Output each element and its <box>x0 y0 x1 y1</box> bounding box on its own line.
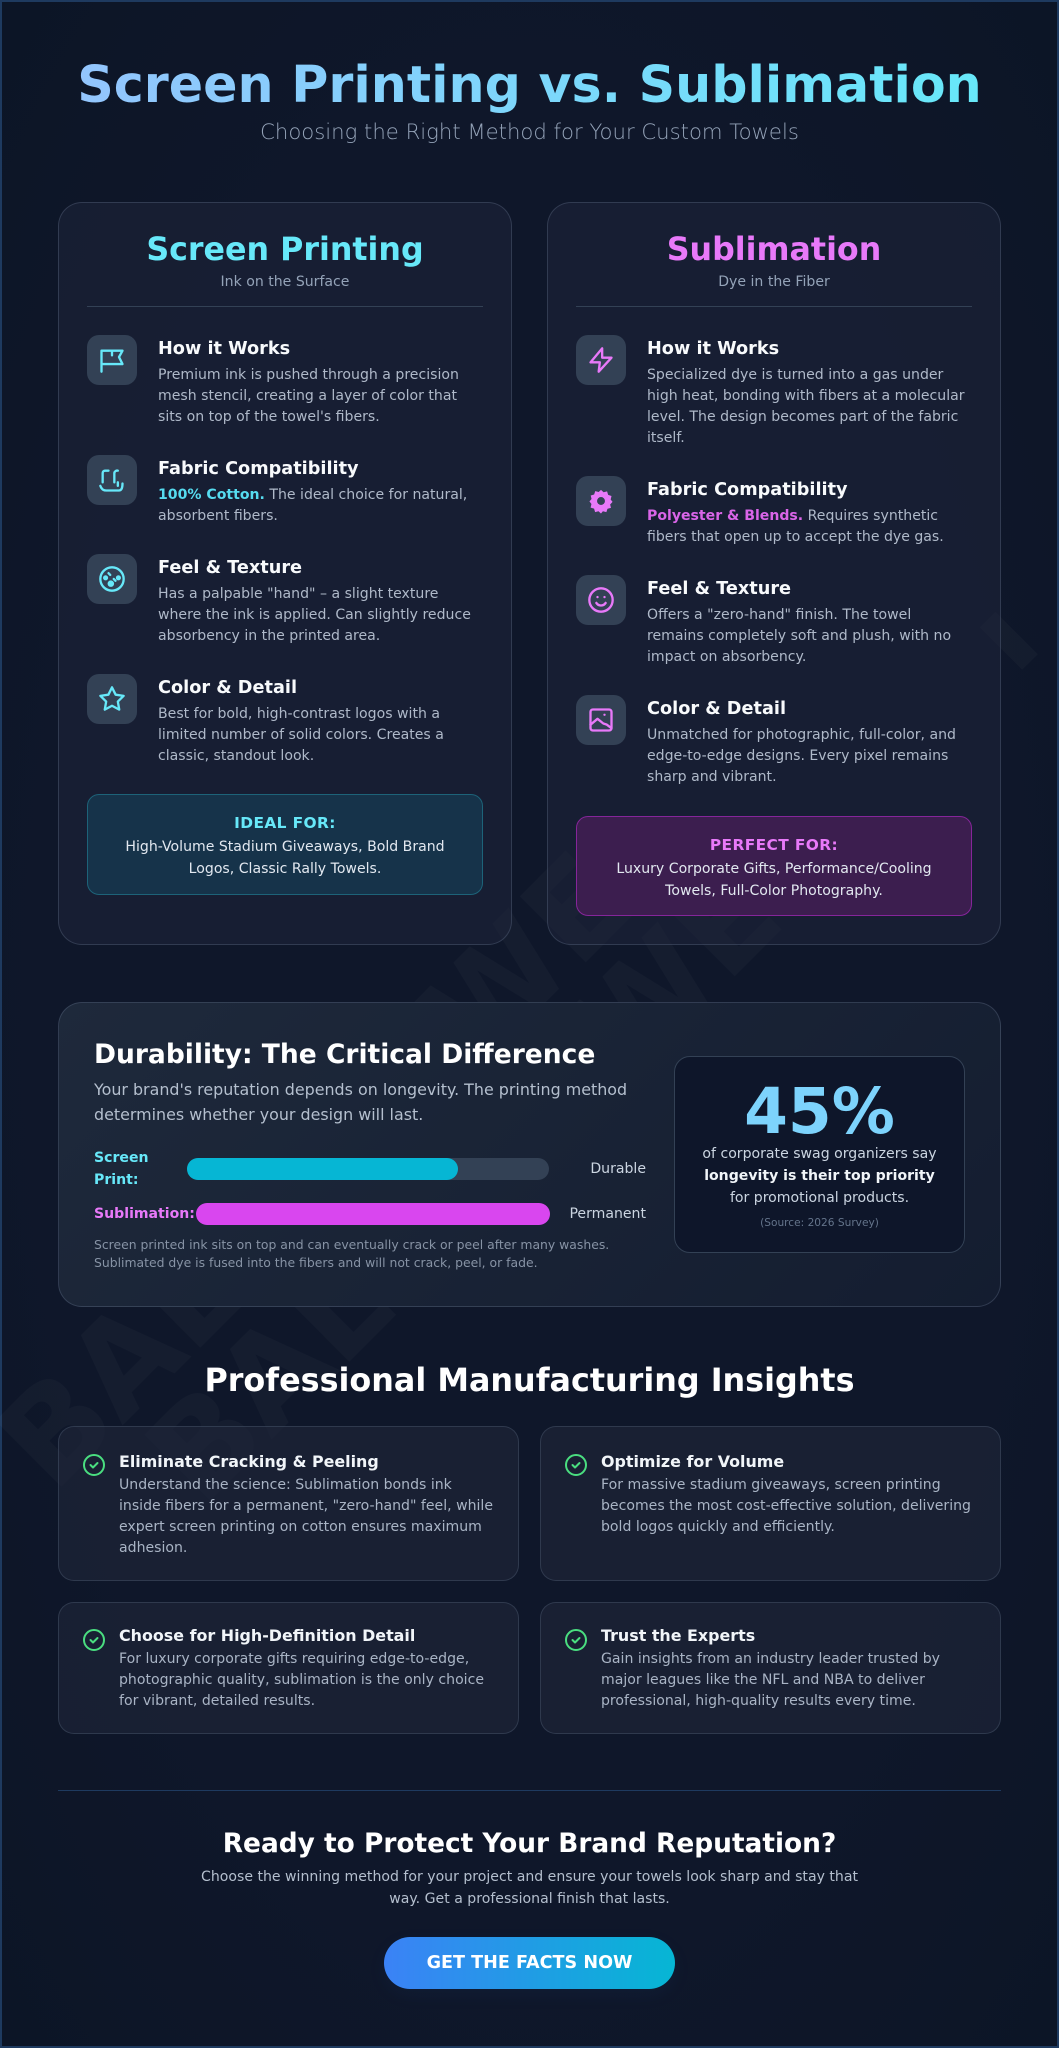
insight text: photographic quality, sublimation is the only choice <box>119 1672 484 1688</box>
insight text: For massive stadium giveaways, screen printing <box>601 1477 941 1493</box>
callout: ideal for: Logos, Classic Rally Towels. <box>189 860 381 876</box>
panel: screen printing <box>58 202 512 945</box>
feel and texture: Offers a "zero-hand" finish. The towel <box>647 607 911 623</box>
bar chart: durability <box>94 1150 646 1225</box>
cta text: Choose the winning method for your project and ensure your towels look sharp and stay that <box>201 1869 858 1885</box>
durability intro <box>94 1080 627 1124</box>
durability note <box>94 1237 609 1270</box>
insight text: adhesion. <box>119 1540 187 1556</box>
icon: fabric <box>87 455 137 505</box>
insight text <box>601 1651 940 1709</box>
stat caption: of corporate swag organizers say <box>702 1146 937 1162</box>
fabric compatibility: fibers that open up to accept the dye gas. <box>647 529 944 545</box>
feel and texture: impact on absorbency. <box>647 649 806 665</box>
insight text: inside fibers for a permanent, "zero-hand" feel, while <box>119 1498 493 1514</box>
how it works <box>576 335 965 446</box>
icon: flag <box>87 335 137 385</box>
feel and texture: absorbency in the printed area. <box>158 628 380 644</box>
feel and texture: where the ink is applied. Can slightly reduce <box>158 607 471 623</box>
durability intro: determines whether your design will last. <box>94 1105 423 1124</box>
feel and texture <box>576 575 951 665</box>
stat value: 45% <box>744 1075 895 1148</box>
insight text: major leagues like the NFL and NBA to deliver <box>601 1672 925 1688</box>
callout: ideal for: High-Volume Stadium Giveaways, Bold Brand <box>125 839 445 855</box>
insight text: bold logos quickly and efficiently. <box>601 1519 835 1535</box>
feel and texture: Feel & Texture <box>158 558 302 578</box>
insight: eliminate cracking <box>58 1426 519 1581</box>
feel and texture: Has a palpable "hand" – a slight texture <box>158 586 438 602</box>
callout: ideal for: IDEAL FOR: <box>234 814 336 832</box>
stat caption: longevity is their top priority <box>704 1168 935 1184</box>
bar: sublimation: Sublimation: <box>94 1206 195 1222</box>
fabric compatibility: Fabric Compatibility <box>647 480 848 500</box>
icon: check <box>565 1454 587 1476</box>
panel: sublimation <box>547 202 1001 945</box>
feel and texture: Feel & Texture <box>647 579 791 599</box>
icon: image <box>576 695 626 745</box>
color and detail: Color & Detail <box>647 699 786 719</box>
feel and texture: remains completely soft and plush, with no <box>647 628 951 644</box>
color and detail: Color & Detail <box>158 678 297 698</box>
panel subheading: Dye in the Fiber <box>718 274 830 290</box>
bar: sublimation <box>94 1203 646 1225</box>
how it works: Premium ink is pushed through a precision <box>158 367 459 383</box>
bar: screen print: Durable <box>590 1161 646 1177</box>
panel: durability <box>58 1002 1001 1307</box>
how it works: sits on top of the towel's fibers. <box>158 409 380 425</box>
how it works <box>87 335 459 425</box>
insight text <box>119 1651 484 1709</box>
insight title: Choose for High-Definition Detail <box>119 1626 415 1645</box>
bar: screen print: Screen <box>94 1150 149 1166</box>
icon: check <box>83 1629 105 1651</box>
color and detail <box>576 695 956 785</box>
cta text <box>201 1869 858 1907</box>
icon: check <box>83 1454 105 1476</box>
color and detail <box>87 674 444 764</box>
insight title: Optimize for Volume <box>601 1452 784 1471</box>
icon: gear <box>576 476 626 526</box>
insight: trust the experts <box>540 1602 1001 1734</box>
insight title: Trust the Experts <box>601 1626 755 1645</box>
durability heading: Durability: The Critical Difference <box>94 1039 595 1070</box>
cta text: way. Get a professional finish that lasts. <box>389 1891 670 1907</box>
callout: perfect for: PERFECT FOR: <box>710 836 838 854</box>
subtitle: Choosing the Right Method for Your Custom Towels <box>260 119 799 144</box>
icon: bolt <box>576 335 626 385</box>
stat source: (Source: 2026 Survey) <box>760 1217 879 1229</box>
insight text: Understand the science: Sublimation bonds ink <box>119 1477 452 1493</box>
color and detail: Unmatched for photographic, full-color, and <box>647 727 956 743</box>
fabric compatibility: absorbent fibers. <box>158 508 278 524</box>
how it works: itself. <box>647 430 685 446</box>
bar: screen print: Print: <box>94 1172 138 1188</box>
background watermark: BALL TOWEL <box>119 782 868 1531</box>
bar: sublimation: Permanent <box>569 1206 646 1222</box>
panel heading: screen printing: Screen Printing <box>146 232 424 268</box>
feel and texture <box>87 554 471 644</box>
panel heading: sublimation: Sublimation <box>667 232 881 268</box>
icon: smile <box>576 575 626 625</box>
how it works: How it Works <box>647 339 779 359</box>
insight text: expert screen printing on cotton ensures maximum <box>119 1519 482 1535</box>
callout: perfect for: Towels, Full-Color Photography. <box>665 882 883 898</box>
icon: textured circle <box>87 554 137 604</box>
stat caption: for promotional products. <box>730 1190 909 1206</box>
insight text: Gain insights from an industry leader trusted by <box>601 1651 940 1667</box>
cta button: GET THE FACTS NOW <box>427 1953 632 1973</box>
color and detail: edge-to-edge designs. Every pixel remains <box>647 748 948 764</box>
how it works: Specialized dye is turned into a gas under <box>647 367 943 383</box>
callout: perfect for <box>576 816 972 916</box>
fabric compatibility: 100% Cotton. The ideal choice for natural, <box>158 487 467 503</box>
callout: ideal for <box>87 794 483 895</box>
color and detail: limited number of solid colors. Creates a <box>158 727 444 743</box>
insights heading: Professional Manufacturing Insights <box>204 1362 855 1399</box>
how it works: high heat, bonding with fibers at a molecular <box>647 388 965 404</box>
title: Screen Printing vs. Sublimation <box>77 55 982 114</box>
insight text: professional, high-quality results every time. <box>601 1693 916 1709</box>
fabric compatibility: Fabric Compatibility <box>158 459 359 479</box>
fabric compatibility <box>87 455 467 524</box>
bar: screen print <box>94 1150 646 1188</box>
fabric compatibility <box>576 476 944 545</box>
icon: check <box>565 1629 587 1651</box>
cta heading: Ready to Protect Your Brand Reputation? <box>223 1828 836 1859</box>
insight text <box>119 1477 493 1556</box>
how it works: level. The design becomes part of the fabric <box>647 409 958 425</box>
color and detail: classic, standout look. <box>158 748 314 764</box>
stat box <box>674 1056 965 1253</box>
fabric compatibility: Polyester & Blends. Requires synthetic <box>647 508 938 524</box>
cta button <box>384 1937 675 1989</box>
how it works: mesh stencil, creating a layer of color that <box>158 388 457 404</box>
insight text <box>601 1477 971 1535</box>
callout: perfect for: Luxury Corporate Gifts, Performance/Cooling <box>616 861 932 877</box>
panel subheading: Ink on the Surface <box>221 274 349 290</box>
how it works: How it Works <box>158 339 290 359</box>
durability note: Sublimated dye is fused into the fibers and will not crack, peel, or fade. <box>94 1255 538 1270</box>
color and detail: sharp and vibrant. <box>647 769 777 785</box>
insight title: Eliminate Cracking & Peeling <box>119 1452 379 1471</box>
insight: optimize for volume <box>540 1426 1001 1581</box>
insight text: For luxury corporate gifts requiring edge-to-edge, <box>119 1651 469 1667</box>
insight text: for vibrant, detailed results. <box>119 1693 315 1709</box>
insight text: becomes the most cost-effective solution, delivering <box>601 1498 971 1514</box>
insight: high definition <box>58 1602 519 1734</box>
durability intro: Your brand's reputation depends on longevity. The printing method <box>94 1080 627 1099</box>
icon: star <box>87 674 137 724</box>
durability note: Screen printed ink sits on top and can eventually crack or peel after many washes. <box>94 1237 609 1252</box>
color and detail: Best for bold, high-contrast logos with a <box>158 706 440 722</box>
stat caption <box>702 1146 937 1206</box>
